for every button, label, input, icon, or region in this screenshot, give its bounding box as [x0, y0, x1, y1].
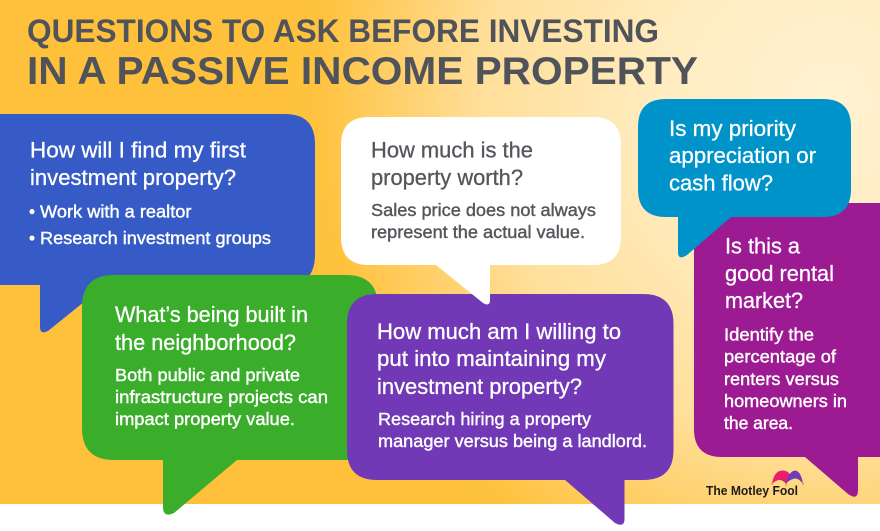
bullet list: Work with a realtor: [40, 202, 192, 222]
icon: jester hat: [771, 470, 804, 486]
heading: priority: [669, 116, 816, 196]
panel: property worth: [341, 117, 621, 304]
body text: property worth: Sales price does not always: [371, 200, 596, 220]
heading: priority: appreciation or: [669, 143, 816, 168]
heading: find property: investment property?: [30, 165, 236, 190]
panel: priority: [638, 99, 851, 257]
speech bubble: green: [82, 275, 378, 515]
body text: rental market: renters versus: [724, 369, 839, 389]
speech bubble: teal: [638, 99, 851, 257]
logo: The Motley Fool: [706, 470, 804, 498]
heading: rental market: market?: [725, 288, 803, 313]
heading: maintenance: [377, 319, 621, 399]
panel: neighborhood: [82, 275, 378, 515]
body text: rental market: percentage of: [724, 346, 836, 366]
heading: neighborhood: the neighborhood?: [115, 330, 296, 355]
bullet list: [29, 202, 271, 248]
logo wordmark: The Motley Fool: [706, 483, 798, 498]
bullet list: Research investment groups: [40, 228, 271, 248]
body text: maintenance: Research hiring a property: [378, 409, 591, 429]
heading: neighborhood: [115, 302, 308, 355]
heading: priority: cash flow?: [669, 170, 773, 196]
heading: maintenance: How much am I willing to: [377, 319, 621, 344]
panel: maintenance: [347, 294, 674, 525]
body text: rental market: Identify the: [724, 324, 814, 344]
body text: rental market: homeowners in: [724, 391, 847, 411]
heading: property worth: How much is the: [371, 138, 533, 162]
heading: rental market: Is this a: [725, 234, 801, 258]
heading: property worth: [371, 138, 533, 190]
title: IN A PASSIVE INCOME PROPERTY: [27, 50, 698, 93]
bullet list: •: [29, 228, 35, 248]
heading: maintenance: put into maintaining my: [377, 346, 606, 371]
body text: rental market: the area.: [724, 413, 793, 433]
body text: rental market: [724, 324, 847, 433]
panel: rental market: [694, 203, 880, 497]
heading: priority: Is my priority: [669, 116, 796, 141]
title: [27, 13, 698, 93]
heading: rental market: [725, 234, 834, 313]
body text: neighborhood: impact property value.: [115, 409, 295, 429]
speech bubble: blue: [0, 114, 315, 332]
title: QUESTIONS TO ASK BEFORE INVESTING: [27, 13, 659, 49]
speech bubble: magenta: [694, 203, 880, 497]
body text: maintenance: [378, 409, 647, 451]
heading: rental market: good rental: [725, 261, 834, 286]
body text: neighborhood: [115, 365, 328, 429]
bullet list: •: [29, 202, 35, 222]
heading: property worth: property worth?: [371, 165, 523, 190]
body text: property worth: represent the actual value.: [371, 222, 585, 242]
body text: neighborhood: Both public and private: [115, 365, 300, 385]
speech bubble: white: [341, 117, 621, 304]
heading: find property: [30, 138, 246, 190]
speech bubble: violet: [347, 294, 674, 525]
panel: find first property: [0, 114, 315, 332]
heading: neighborhood: What’s being built in: [115, 302, 308, 327]
body text: maintenance: manager versus being a landlord.: [378, 431, 647, 451]
heading: find property: How will I find my first: [30, 138, 246, 162]
body text: neighborhood: infrastructure projects can: [115, 387, 328, 407]
heading: maintenance: investment property?: [377, 374, 582, 399]
body text: property worth: [371, 200, 596, 242]
